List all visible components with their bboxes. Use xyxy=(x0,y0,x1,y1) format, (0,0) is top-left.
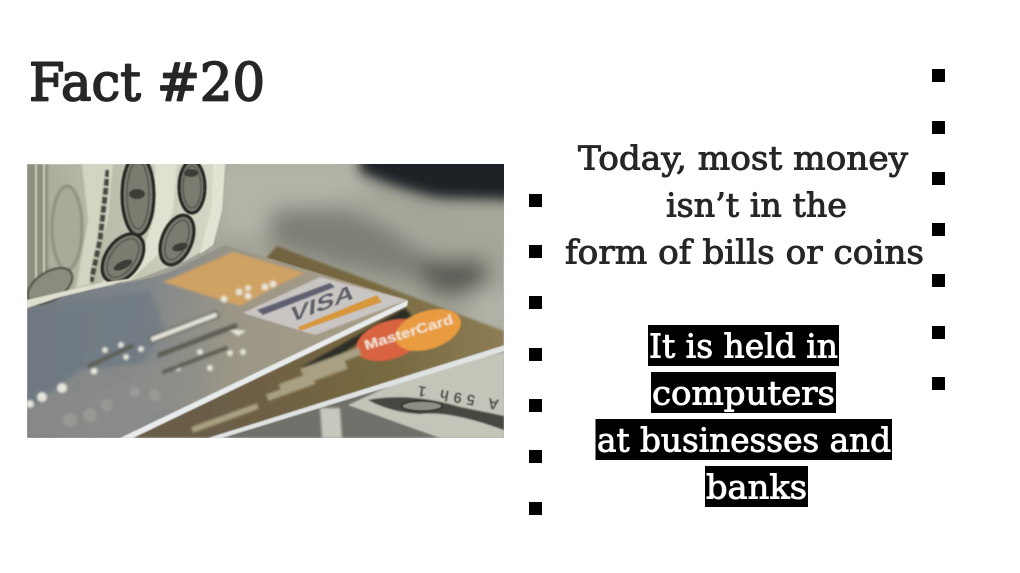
mastercard logo: MasterCard xyxy=(362,312,455,353)
faint card circles xyxy=(63,387,161,427)
second card xyxy=(120,246,504,438)
visa logo xyxy=(243,277,407,335)
right bullet column xyxy=(932,69,945,390)
body text xyxy=(565,138,924,272)
body text: isn’t in the xyxy=(666,186,847,224)
body text: form of bills or coins xyxy=(565,232,924,272)
rolled banknotes xyxy=(21,155,225,311)
title: Fact #20 xyxy=(29,54,265,114)
highlighted text: It is held in xyxy=(649,326,838,366)
first card xyxy=(27,245,407,438)
left bullet column xyxy=(529,194,542,515)
bill under cards: A 59h 1 xyxy=(417,382,500,413)
bill under cards xyxy=(205,345,504,438)
dark shadow under first card xyxy=(300,308,412,368)
highlighted text: banks xyxy=(706,468,807,506)
body text: Today, most money xyxy=(578,138,908,178)
gold hologram panel xyxy=(163,252,305,306)
dark note portraits xyxy=(100,164,208,284)
photo: banknotes and credit cards xyxy=(21,150,520,438)
note margin stripes xyxy=(76,164,113,288)
card numbers on second card xyxy=(191,347,361,433)
highlighted text xyxy=(596,325,892,507)
highlighted text: computers xyxy=(652,374,835,412)
card white edge xyxy=(208,345,505,438)
mastercard logo xyxy=(355,308,462,362)
highlighted text: at businesses and xyxy=(597,420,891,460)
slide xyxy=(27,60,945,515)
white card edge xyxy=(120,300,408,438)
visa logo: VISA xyxy=(290,280,355,328)
blurred background notes xyxy=(215,155,520,330)
embossed digits xyxy=(26,280,276,408)
